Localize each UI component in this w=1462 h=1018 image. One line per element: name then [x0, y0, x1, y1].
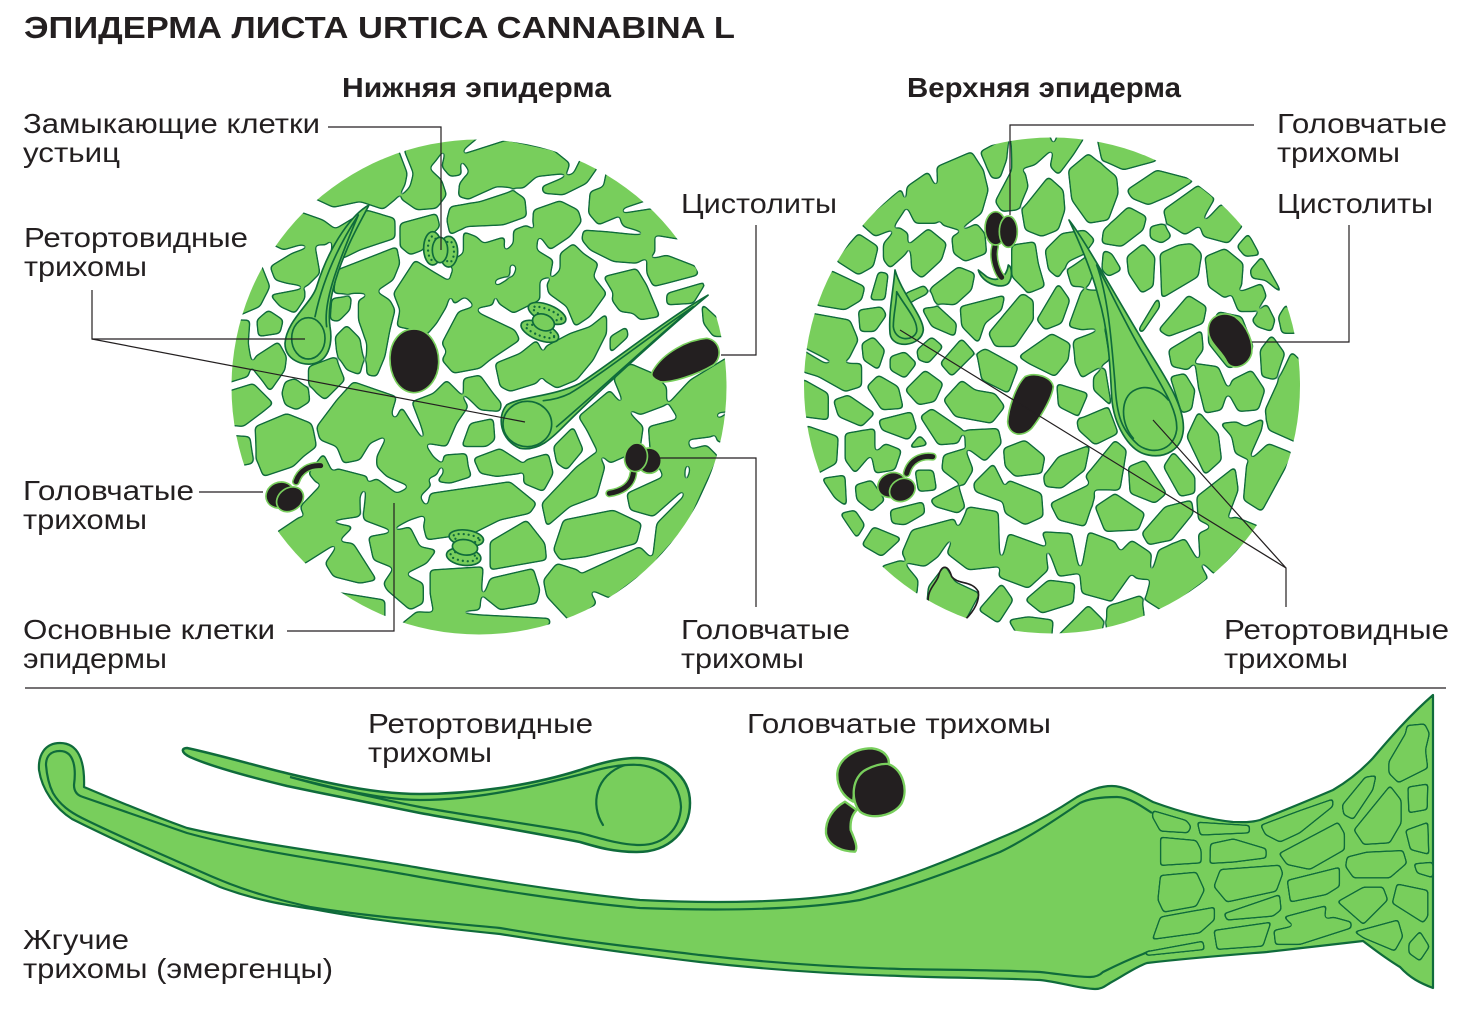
- label: capitate trichomes left: [23, 475, 194, 535]
- capitate trichome: lower left: [874, 456, 933, 506]
- label: capitate trichomes left: трихомы: [23, 504, 147, 535]
- stoma: guard cells bottom: [445, 528, 485, 568]
- capitate trichome: right: [609, 441, 661, 493]
- label: retort trichomes bottom: Ретортовидные: [368, 708, 593, 739]
- lower epidermis cells: [227, 133, 730, 642]
- label: guard cells: Замыкающие клетки: [23, 108, 320, 139]
- label: guard cells: [23, 108, 320, 168]
- large capitate trichome: [826, 748, 905, 852]
- label: capitate trichomes bottom: Головчатые трихомы: [747, 708, 1051, 739]
- label: capitate trichomes left: Головчатые: [23, 475, 194, 506]
- label: stinging trichomes: [23, 924, 333, 984]
- label: basic epidermal cells: [23, 614, 275, 674]
- retort trichome: left: [285, 205, 369, 364]
- label: cystoliths center: Цистолиты: [681, 188, 837, 219]
- label: capitate trichomes center: [681, 614, 850, 674]
- cystolith: right: [1208, 314, 1252, 367]
- cystolith: center: [1008, 375, 1053, 434]
- leader lines: upper epidermis: [900, 125, 1349, 607]
- retort trichome: large: [1069, 220, 1183, 456]
- stinging trichome base cells: [1144, 723, 1433, 962]
- label: capitate trichomes right: [1277, 108, 1447, 168]
- capitate trichome: top: [978, 212, 1017, 286]
- label: retort trichomes right: [1224, 614, 1449, 674]
- label: capitate trichomes center: Головчатые: [681, 614, 850, 645]
- label: cystoliths right: Цистолиты: [1277, 188, 1433, 219]
- retort trichome: small: [890, 270, 923, 344]
- label: basic epidermal cells: Основные клетки: [23, 614, 275, 645]
- label: stinging trichomes: Жгучие: [23, 924, 129, 955]
- label: retort trichomes left: Ретортовидные: [24, 222, 248, 253]
- label: retort trichomes left: [24, 222, 248, 282]
- large retort trichome: [183, 748, 690, 852]
- cystolith: right: [652, 338, 719, 382]
- capitate trichome: left: [262, 466, 321, 517]
- label: capitate trichomes right: Головчатые: [1277, 108, 1447, 139]
- title: ЭПИДЕРМА ЛИСТА URTICA CANNABINA L: [24, 10, 735, 45]
- label: retort trichomes right: трихомы: [1224, 643, 1348, 674]
- stoma: guard cells middle: [520, 302, 567, 344]
- panel: lower epidermis circle: [227, 133, 730, 642]
- cystolith: center: [390, 329, 439, 393]
- label: retort trichomes left: трихомы: [24, 251, 147, 282]
- outlined cell: dark border: [928, 567, 979, 620]
- retort trichome: right: [501, 295, 708, 449]
- panel: upper epidermis circle: [802, 135, 1303, 638]
- stoma: guard cells top: [424, 232, 458, 267]
- label: retort trichomes bottom: трихомы: [368, 737, 492, 768]
- label: capitate trichomes center: трихомы: [681, 643, 804, 674]
- upper epidermis cells: [802, 135, 1303, 638]
- label: stinging trichomes: трихомы (эмергенцы): [23, 953, 333, 984]
- stinging trichome with base: [39, 695, 1433, 989]
- label: retort trichomes bottom: [368, 708, 593, 768]
- label: guard cells: устьиц: [23, 137, 120, 168]
- label: capitate trichomes right: трихомы: [1277, 137, 1400, 168]
- leader lines: lower epidermis: [92, 127, 756, 631]
- heading: upper epidermis: Верхняя эпидерма: [907, 72, 1181, 103]
- heading: lower epidermis: Нижняя эпидерма: [342, 72, 611, 103]
- label: retort trichomes right: Ретортовидные: [1224, 614, 1449, 645]
- label: basic epidermal cells: эпидермы: [23, 643, 167, 674]
